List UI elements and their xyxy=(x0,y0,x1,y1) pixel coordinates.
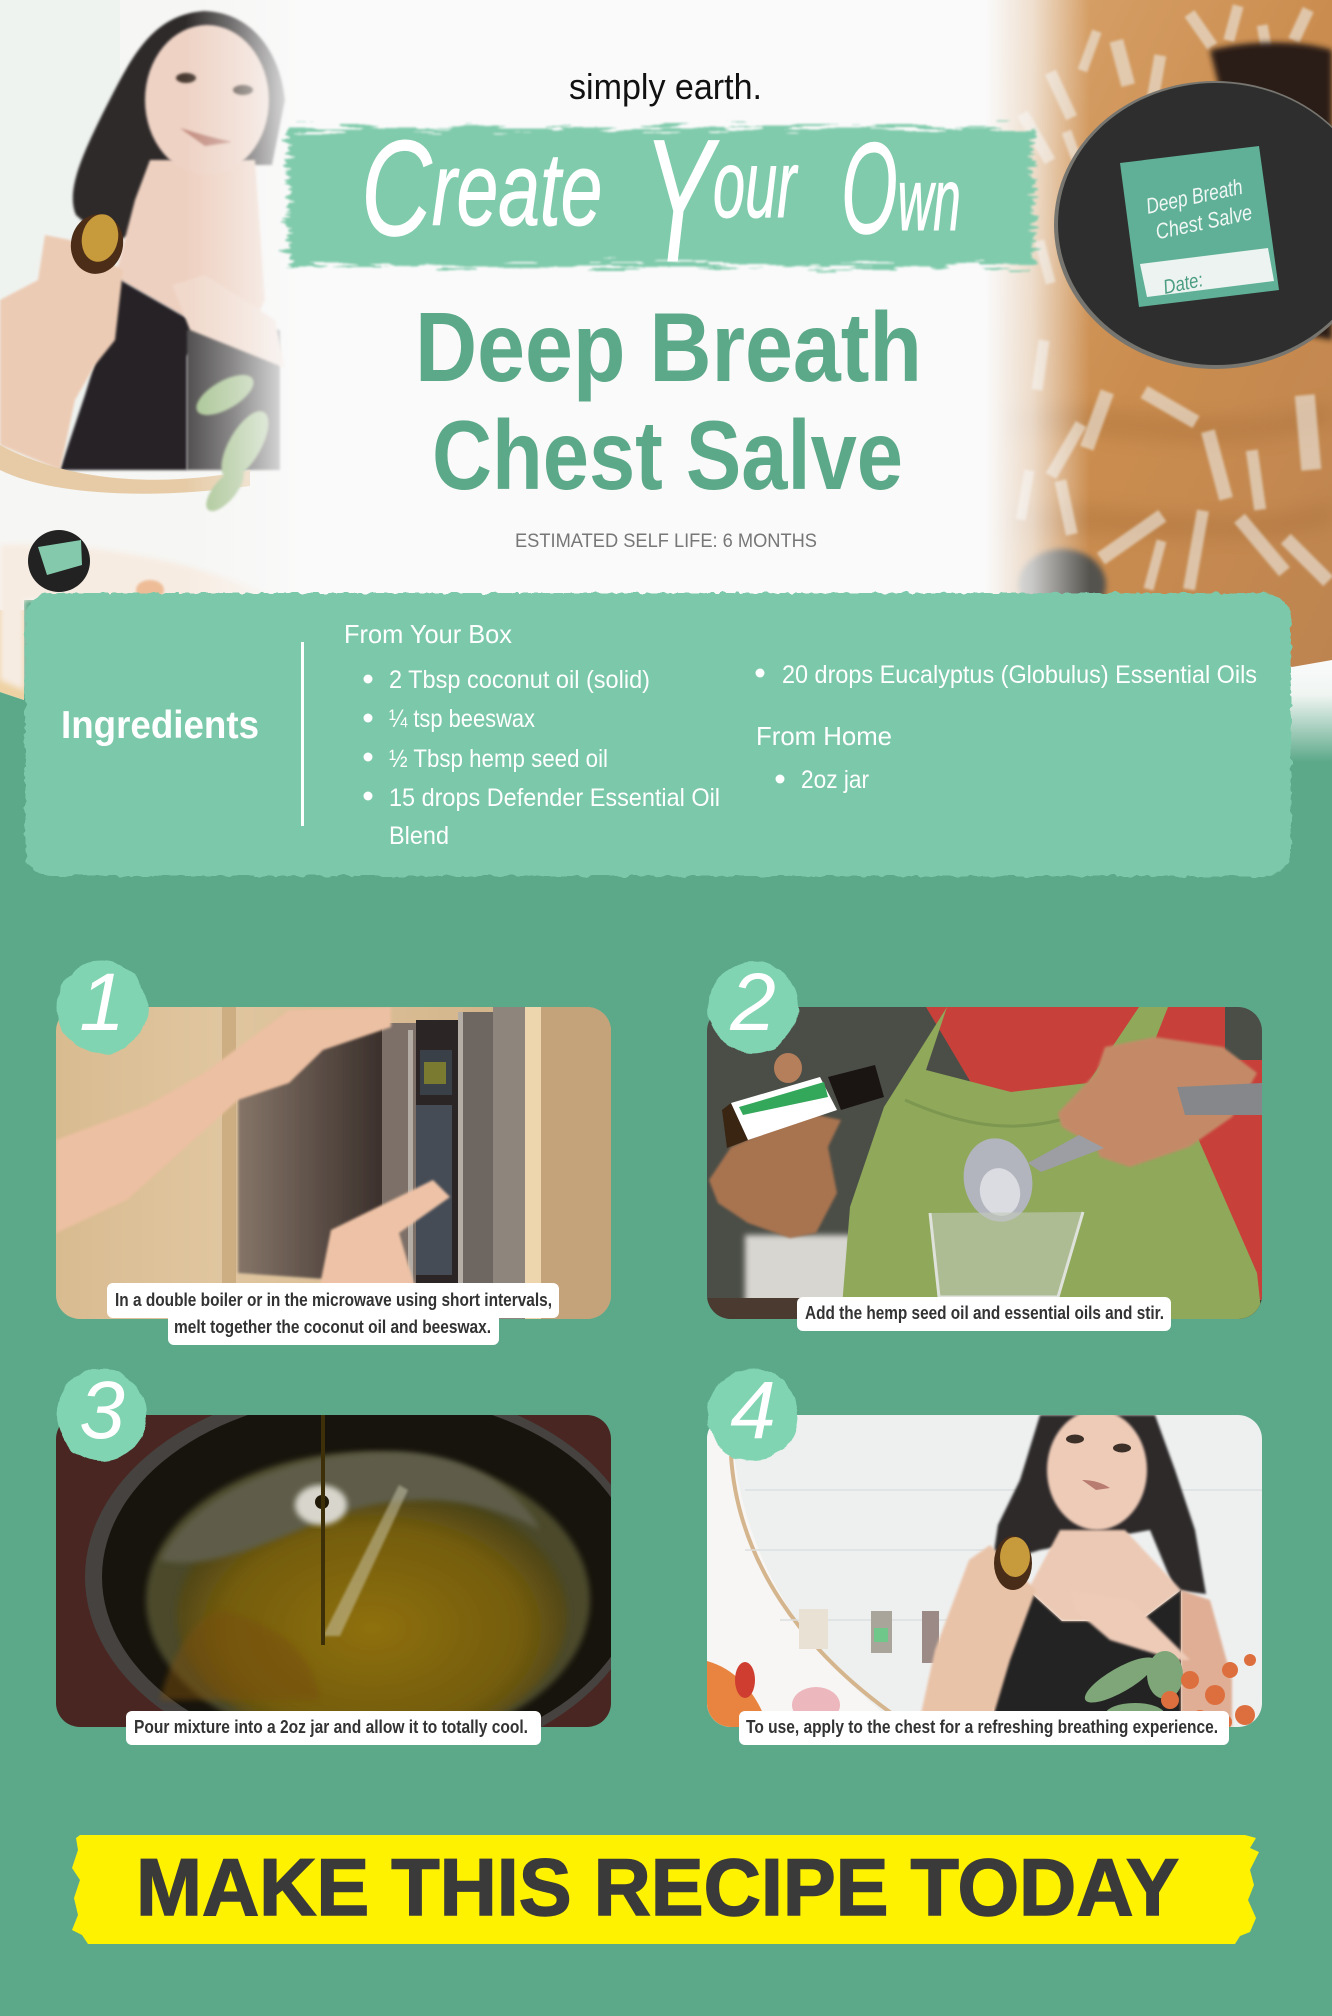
step 2 badge xyxy=(708,957,798,1053)
divider xyxy=(301,642,304,826)
shelf life note: ESTIMATED SELF LIFE: 6 MONTHS xyxy=(515,530,817,552)
title: Deep Breath xyxy=(415,292,922,402)
label date strip xyxy=(1140,248,1274,297)
step 4 badge: 4 xyxy=(730,1365,776,1456)
script heading: C xyxy=(361,113,433,265)
from your box list: ¼ tsp beeswax xyxy=(389,705,535,733)
from your box list: From Your Box xyxy=(344,619,512,649)
title xyxy=(415,292,922,510)
step 2 xyxy=(707,957,1262,1331)
label text: Deep Breath xyxy=(1144,174,1245,219)
label text: Date: xyxy=(1161,269,1205,299)
photo: wood with crystals xyxy=(985,0,1332,680)
call to action banner xyxy=(72,1835,1259,1944)
step 4 badge xyxy=(708,1365,798,1461)
dark bowl shadow xyxy=(1210,42,1332,340)
title: Chest Salve xyxy=(432,400,903,510)
from home list: 20 drops Eucalyptus (Globulus) Essential Oils xyxy=(782,661,1257,689)
script heading: wn xyxy=(898,151,961,250)
step 2 caption xyxy=(797,1297,1171,1331)
right photo fade xyxy=(985,0,1090,600)
step 3 xyxy=(56,1368,611,1745)
step 2 caption: Add the hemp seed oil and essential oils and stir. xyxy=(805,1303,1164,1323)
tin label xyxy=(1120,146,1279,307)
step 4 caption: To use, apply to the chest for a refreshing breathing experience. xyxy=(746,1717,1218,1737)
step 2 photo: measuring hemp seed oil xyxy=(707,1007,1262,1319)
left photo fade xyxy=(185,0,305,600)
from your box list: Blend xyxy=(389,822,449,850)
step 3 badge: 3 xyxy=(79,1365,125,1456)
crystals xyxy=(1016,4,1332,590)
step 3 caption: Pour mixture into a 2oz jar and allow it to totally cool. xyxy=(134,1717,528,1737)
script heading: O xyxy=(841,117,898,261)
from your box list: ½ Tbsp hemp seed oil xyxy=(389,745,608,773)
brush banner: create your own xyxy=(288,102,1034,299)
call to action text: MAKE THIS RECIPE TODAY xyxy=(136,1843,1179,1933)
step 4 xyxy=(707,1365,1262,1745)
panel: ingredients xyxy=(25,593,1291,876)
from home list: From Home xyxy=(756,721,892,751)
script heading: Y xyxy=(643,102,719,299)
script heading: our xyxy=(713,130,799,238)
label text: Chest Salve xyxy=(1153,199,1254,244)
from home list: 2oz jar xyxy=(801,766,869,794)
hero background xyxy=(0,0,1332,600)
from your box list xyxy=(344,619,720,850)
step 3 caption xyxy=(126,1711,541,1745)
white corner behind ingredients panel xyxy=(1270,640,1332,762)
script heading: reate xyxy=(432,132,602,248)
step 1 badge: 1 xyxy=(79,957,125,1048)
step 1 caption: In a double boiler or in the microwave using short intervals, xyxy=(115,1290,552,1310)
step 4 photo: woman applying salve xyxy=(707,1410,1262,1729)
from your box list: 2 Tbsp coconut oil (solid) xyxy=(389,666,650,694)
step 3 photo: oil in pot xyxy=(56,1415,611,1727)
step 3 badge xyxy=(57,1365,147,1461)
step 1 photo: microwave xyxy=(56,1007,611,1319)
step 4 caption xyxy=(739,1711,1229,1745)
from your box list: 15 drops Defender Essential Oil xyxy=(389,784,720,812)
photo: woman holding salve jar xyxy=(0,0,300,700)
label text xyxy=(1144,173,1266,299)
step 1 badge xyxy=(57,957,147,1053)
ingredients heading: Ingredients xyxy=(61,704,259,747)
step 2 badge: 2 xyxy=(729,957,776,1048)
step 1 caption: melt together the coconut oil and beeswax. xyxy=(174,1317,491,1337)
logo: simply earth: simply earth. xyxy=(569,66,762,107)
from home list xyxy=(756,661,1257,794)
step 1 xyxy=(56,957,611,1345)
salve tin xyxy=(1054,81,1332,369)
script heading xyxy=(361,102,961,299)
step 1 caption xyxy=(107,1283,559,1345)
